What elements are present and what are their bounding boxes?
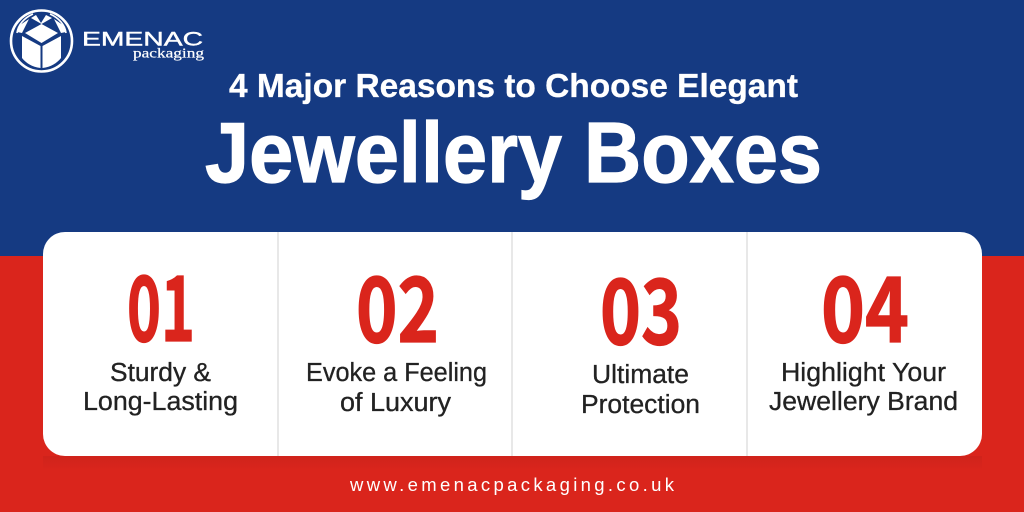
reason 04: Jewellery Brand xyxy=(769,388,958,416)
reason 03 xyxy=(581,240,700,419)
panel: reasons card xyxy=(43,232,982,456)
reason 04 xyxy=(769,238,958,416)
reason 04: 04 xyxy=(821,238,909,368)
reason 02: 02 xyxy=(356,238,439,368)
title line 1: 4 Major Reasons to Choose Elegant xyxy=(229,67,798,104)
reason 03: Ultimate xyxy=(592,361,689,389)
reason 01: Long-Lasting xyxy=(83,388,238,416)
background: blue top band xyxy=(0,0,1024,256)
reason 04: Highlight Your xyxy=(781,359,947,387)
icon: box in ring xyxy=(11,10,72,72)
reason 03: Protection xyxy=(581,391,700,419)
reason 01: Sturdy & xyxy=(110,359,211,387)
background: red bottom band xyxy=(0,256,1024,512)
reason 02 xyxy=(306,238,487,417)
logo: Emenac Packaging xyxy=(11,10,204,72)
reason 01 xyxy=(83,237,238,416)
title line 2: Jewellery Boxes xyxy=(205,106,822,201)
logo wordmark: EMENAC xyxy=(82,30,203,50)
logo tagline: packaging xyxy=(133,46,204,60)
reason 01: 01 xyxy=(127,237,195,367)
reason 02: Evoke a Feeling xyxy=(306,359,487,387)
reason 02: of Luxury xyxy=(340,389,451,417)
reason 03: 03 xyxy=(600,240,682,370)
website url: www.emenacpackaging.co.uk xyxy=(349,474,675,495)
